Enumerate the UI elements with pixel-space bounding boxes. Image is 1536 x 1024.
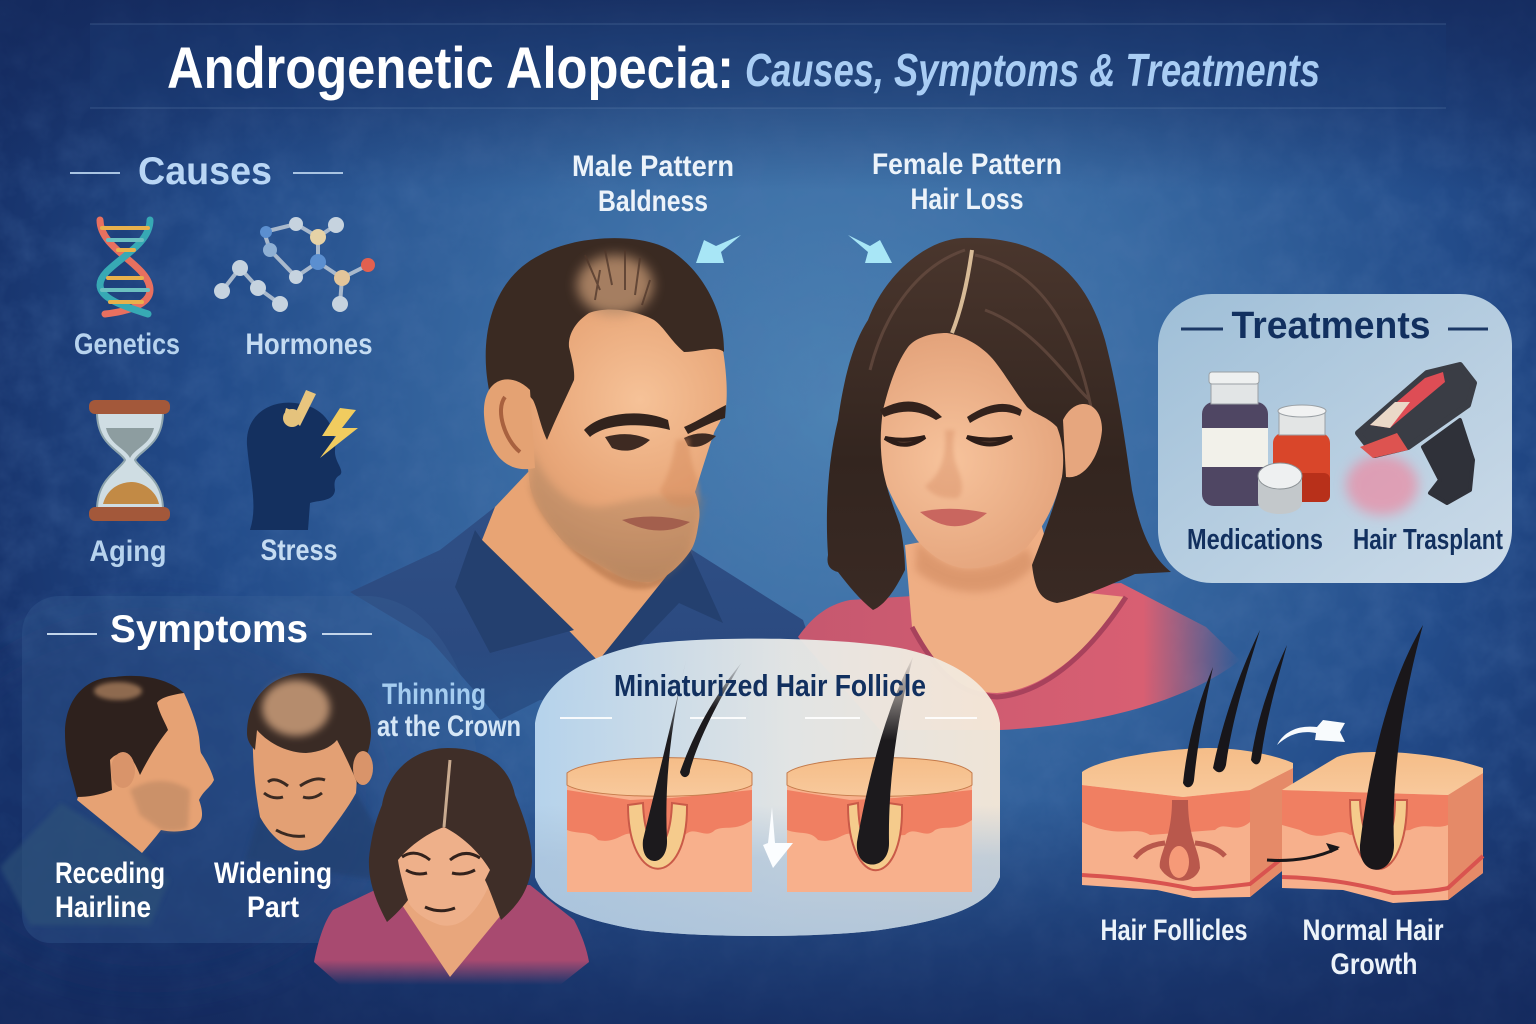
label: stress: Stress [260,534,338,567]
nose [925,430,962,498]
panel: symptoms: Part [247,891,299,924]
side face [1448,773,1483,900]
chest [402,870,501,977]
mouth [920,509,987,526]
label: genetics: Genetics [74,328,180,361]
panel: symptoms [0,596,589,985]
label: hormones: Hormones [246,328,372,361]
heading: symptoms: Symptoms [110,608,308,651]
icon: DNA [100,220,150,314]
bottom band [1282,856,1483,893]
cheek shadow [130,781,190,831]
arrow: to female [848,235,892,263]
dermis [1082,785,1250,835]
crown [262,680,330,736]
shirt [350,507,830,720]
label: male pattern baldness [572,150,734,218]
thinning crown [577,255,653,315]
shirt [314,885,589,985]
nose [660,438,700,507]
panel: symptoms: Hairline [55,891,151,924]
face [526,301,727,582]
eyes [885,437,925,445]
shirt [0,803,170,925]
man portrait [350,238,830,720]
jaw shadow [530,487,689,589]
crown hair strokes [585,250,650,305]
label: normal hair growth [1302,914,1444,981]
collar [912,597,1126,697]
heading: miniaturized hair follicle: Miniaturized Hair Follicle [614,668,926,703]
label: hair follicles: Hair Follicles [1100,914,1248,947]
face [394,818,495,926]
shrunken follicle [1160,800,1200,881]
dermis [1282,790,1448,836]
label: male pattern baldness: Baldness [598,185,708,218]
collar right [599,548,723,660]
panel: treatments [1158,294,1512,583]
label: normal hair growth: Growth [1330,948,1418,981]
collar left [455,530,574,653]
neck [482,470,690,662]
icon: hormones molecule [214,217,375,312]
label: thinning at the crown: Thinning [382,678,486,711]
panel: symptoms: at the Crown [377,710,521,743]
hair [1360,625,1423,870]
ear [353,751,373,785]
label: male pattern baldness: Male Pattern [572,150,734,183]
follicle [1350,800,1407,869]
bottom band [1082,860,1280,889]
features [402,853,480,911]
label: female pattern hair loss [872,148,1062,216]
subtitle: Causes, Symptoms & Treatments [745,44,1320,96]
ear [111,752,135,788]
icon: medications [1202,372,1330,514]
stubble [530,450,705,582]
label: female pattern hair loss: Female Pattern [872,148,1062,181]
skin top [1082,748,1293,797]
arrow: curved to normal growth [1277,720,1345,745]
side face [1250,768,1293,897]
skin top [1282,752,1483,795]
eyes [605,434,650,451]
ear [1063,404,1102,477]
icon: laser device [1346,365,1474,515]
hairs [1183,667,1213,787]
title band [90,24,1446,108]
label: medications: Medications [1187,524,1323,556]
panel: miniaturized hair follicle [535,639,1000,936]
illustration: widening part man [245,673,378,880]
diagram: normal follicle [787,657,972,892]
brows [880,401,942,420]
label: receding hairline: Receding [55,857,165,890]
label: female pattern hair loss: Hair Loss [910,183,1024,216]
arrow: down [763,807,793,868]
hair follicles diagram [1082,630,1293,898]
part [952,250,972,333]
neck and face [77,690,214,853]
hair strands [870,250,1095,430]
label: widening part: Widening [214,857,332,890]
heading: causes: Causes [138,150,272,193]
brows [584,413,670,437]
chest [905,520,1126,693]
face [253,700,357,851]
diagram: miniaturized follicle [567,657,752,892]
thin spot [94,682,142,700]
hair [486,238,724,440]
title: Androgenetic Alopecia: [167,36,734,101]
hair [369,748,532,922]
arrow: to male [696,235,741,263]
part [444,760,450,827]
illustration: receding hairline man [0,676,214,925]
heading: treatments: Treatments [1232,305,1430,347]
woman portrait [798,238,1240,730]
normal hair growth diagram [1282,625,1483,903]
hair [827,238,1171,610]
hair [247,673,371,785]
label: normal hair growth: Normal Hair [1302,914,1444,947]
block body [1282,768,1483,903]
face features [264,779,325,836]
face [872,326,1065,568]
illustration: thinning crown woman [314,748,589,985]
arrow: black link [1267,843,1340,860]
neck shadow [915,540,1035,592]
icon: stress head [247,390,358,530]
panel: causes [70,150,375,568]
shoulders [245,793,378,880]
label: aging: Aging [90,535,166,568]
ear [484,379,535,469]
block body [1082,763,1293,898]
shirt [798,583,1240,730]
hair [65,676,184,797]
icon: hourglass [89,400,170,521]
mouth [622,516,690,531]
